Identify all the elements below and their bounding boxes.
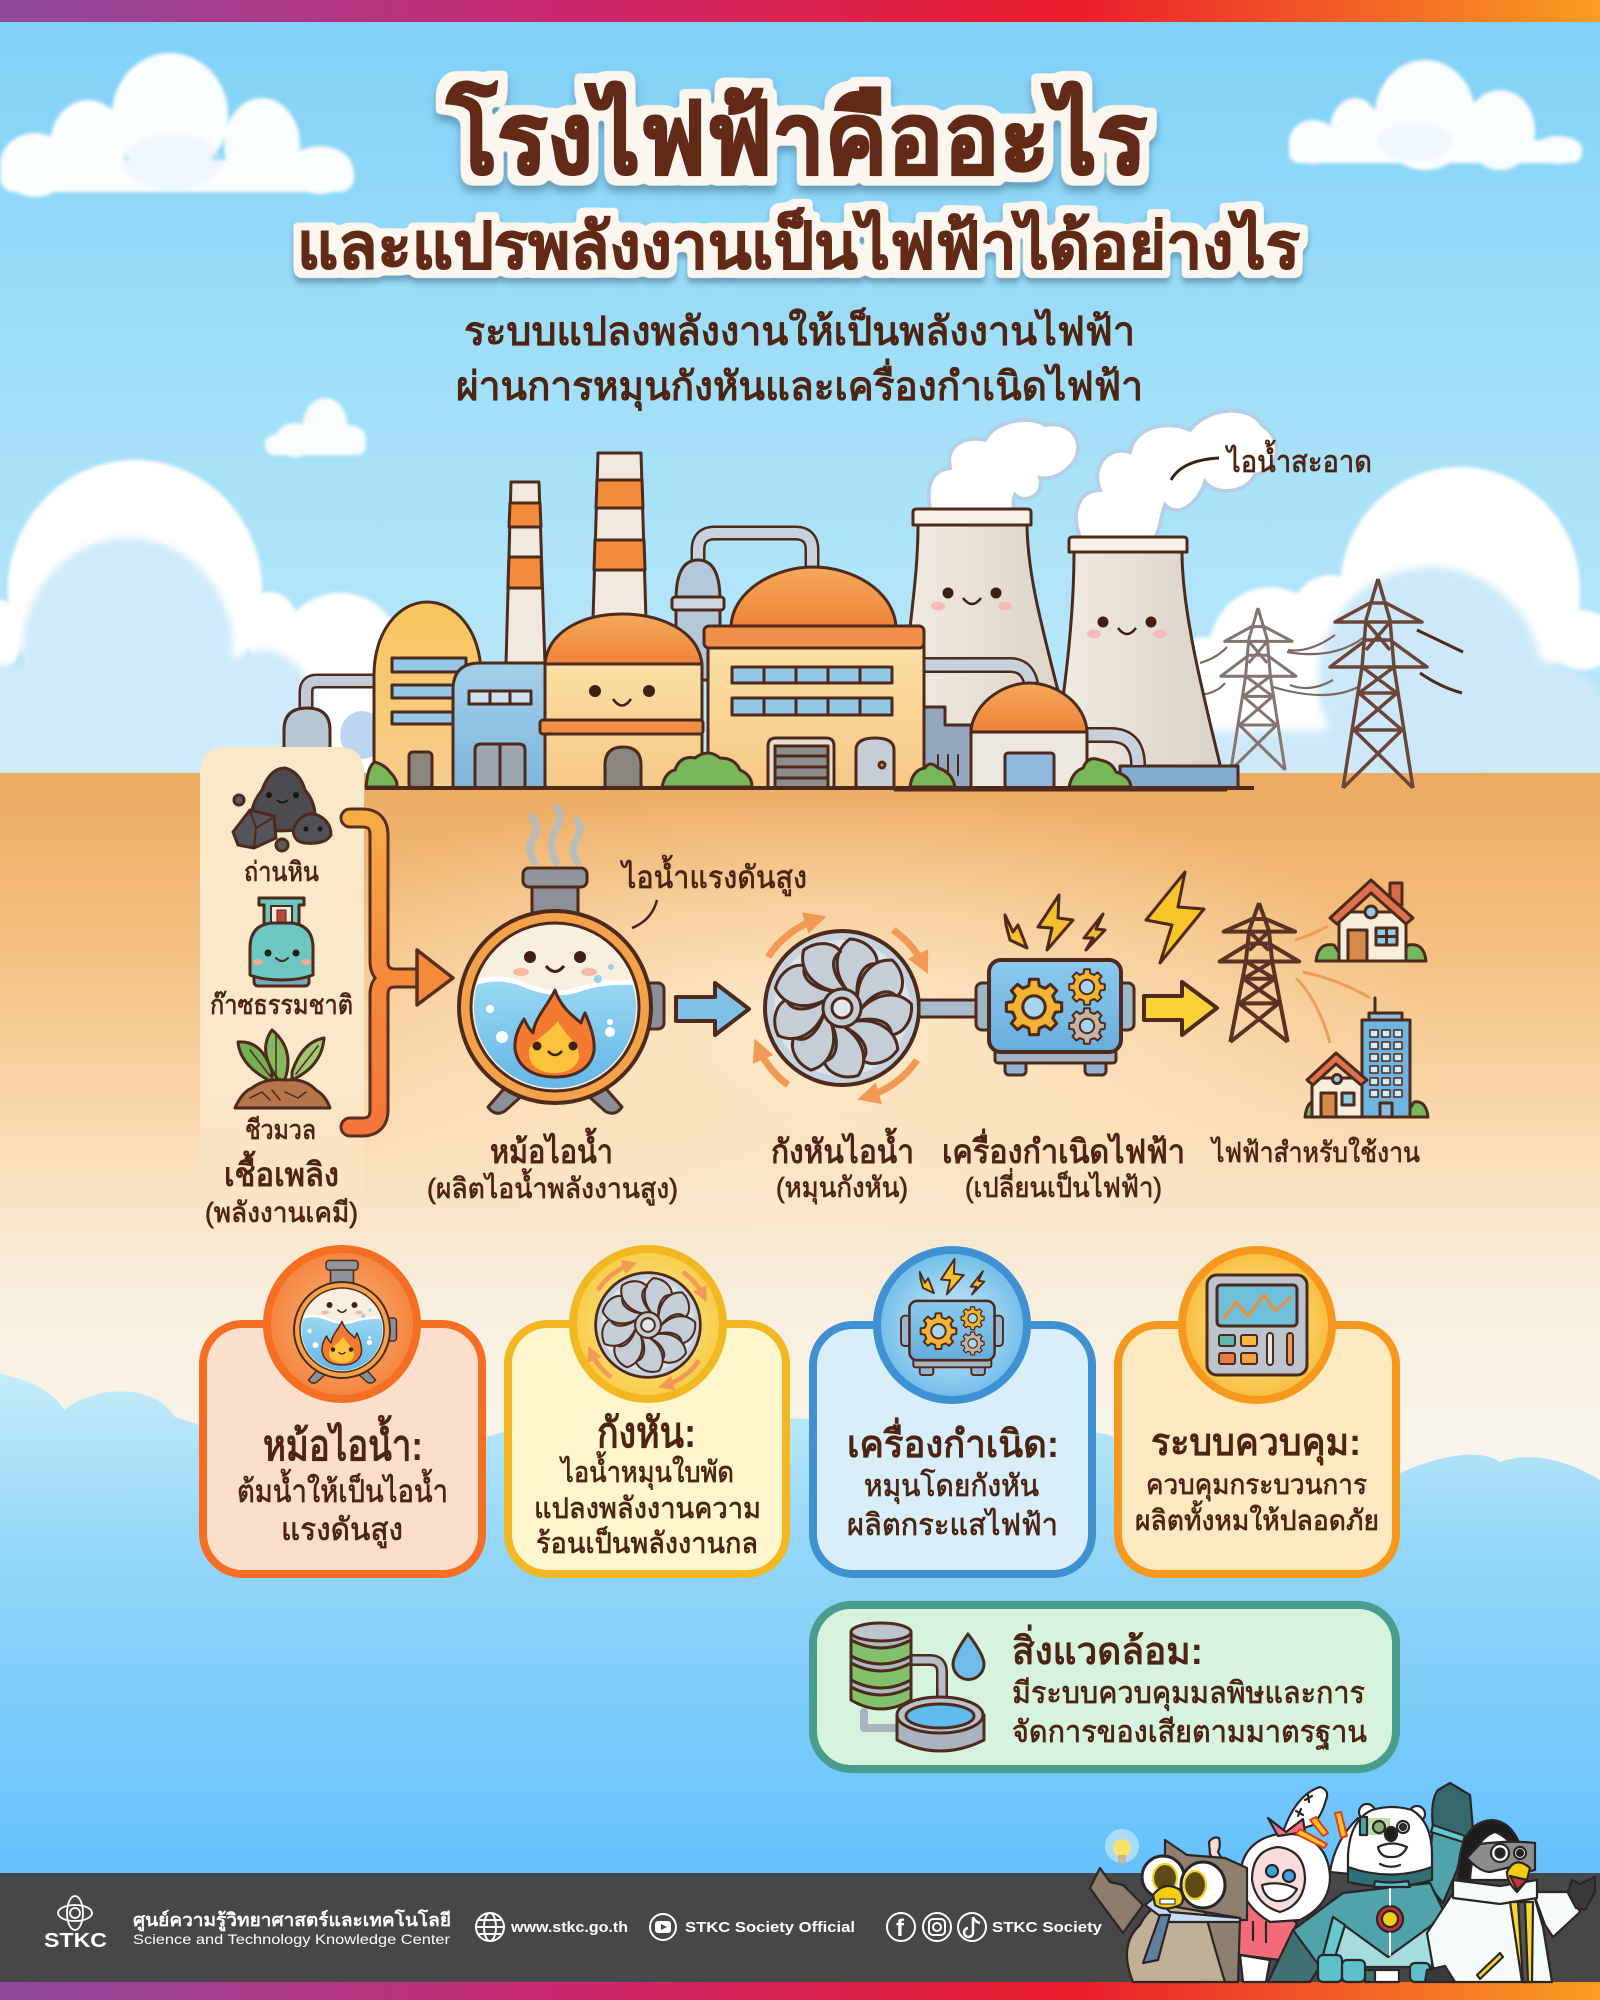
yellow silo: [374, 602, 481, 788]
background sky: [0, 0, 1600, 776]
footer logo: [44, 1896, 107, 1952]
cloud: large left: [0, 460, 398, 790]
bushes: [366, 753, 1131, 787]
icon: turbine: [758, 919, 924, 1097]
text: natural gas: ก๊าซธรรมชาติ: [210, 990, 353, 1020]
subtitle: ระบบแปลงพลังงานให้เป็นพลังงานไฟฟ้า: [464, 306, 1135, 354]
chimney thin: [506, 482, 545, 664]
card text: [237, 1414, 448, 1548]
card text: ระบบควบคุม:: [1151, 1422, 1361, 1466]
cooling tower rear: [895, 509, 1080, 790]
label: steam turbine: กังหันไอน้ำ: [771, 1127, 914, 1170]
youtube link: STKC Society Official: [685, 1919, 855, 1936]
coal face: [266, 792, 322, 832]
label: steam turbine: [771, 1127, 914, 1205]
ground and lower background: [0, 773, 1600, 1493]
icon: rising steam: [530, 807, 580, 862]
footer organisation name: [133, 1909, 451, 1947]
arrow: boiler to turbine: [676, 983, 749, 1035]
light bulb: [1105, 1829, 1139, 1863]
icon: grid pylon: [1220, 903, 1299, 1042]
subtitle: ผ่านการหมุนกังหันและเครื่องกำเนิดไฟฟ้า: [456, 358, 1143, 412]
icon: generator: [976, 895, 1134, 1075]
text: coal: ถ่านหิน: [244, 857, 319, 887]
blue tank: [672, 560, 724, 680]
label: high pressure steam: [619, 855, 807, 928]
face on rear tower: [931, 588, 1012, 610]
icon: house and tower block: [1305, 998, 1428, 1117]
website link: [476, 1913, 628, 1941]
text: biomass: ชีวมวล: [245, 1115, 316, 1145]
steam plumes: [929, 411, 1277, 538]
icon: biomass: [235, 1030, 330, 1108]
left tank and pipe: [284, 681, 380, 760]
card text: ผลิตกระแสไฟฟ้า: [847, 1507, 1058, 1542]
large pylon: [1330, 579, 1427, 788]
card text: ร้อนเป็นพลังงานกล: [536, 1525, 758, 1560]
icon: boiler: [459, 868, 664, 1113]
card text: ควบคุมกระบวนการ: [1146, 1469, 1367, 1502]
ground glow: [200, 790, 1440, 1250]
card text: ต้มน้ำให้เป็นไอน้ำ: [237, 1469, 448, 1509]
connecting pipes: [924, 665, 1138, 765]
icon: large lightning bolt: [1146, 872, 1204, 963]
panel: boiler card: [203, 1249, 482, 1574]
owl: [1090, 1840, 1247, 1982]
gray annex: [924, 707, 971, 788]
card text: หม้อไอน้ำ:: [263, 1414, 423, 1469]
card text: แรงดันสูง: [281, 1512, 403, 1548]
icon: generator small: [901, 1259, 1003, 1375]
youtube link: [650, 1914, 855, 1940]
card text: [534, 1409, 761, 1560]
cloud: top right: [1289, 60, 1582, 170]
card text: ไอน้ำหมุนใบพัด: [559, 1451, 734, 1490]
arrow: generator to grid: [1144, 982, 1217, 1035]
footer band: [0, 1873, 1600, 1982]
icon: coal: [233, 768, 331, 851]
icon: house: [1316, 880, 1426, 961]
face on front tower: [1087, 616, 1167, 638]
cloud: large right: [1175, 467, 1600, 793]
icon: gas cylinder: [250, 898, 313, 986]
footer organisation name: Science and Technology Knowledge Center: [133, 1931, 450, 1947]
card text: จัดการของเสียตามมาตรฐาน: [1012, 1716, 1367, 1750]
social icons: f: [896, 1915, 905, 1942]
lower sky wave: [0, 1374, 1600, 1880]
label: boiler: (ผลิตไอน้ำพลังงานสูง): [427, 1168, 678, 1206]
footer logo: STKC: [44, 1930, 107, 1952]
label: clean steam: [1171, 440, 1372, 480]
card text: [1012, 1624, 1367, 1750]
label: generator: [942, 1128, 1185, 1203]
panel: environment card: [813, 1605, 1396, 1769]
panel: fuels: [200, 747, 364, 1240]
card text: [1135, 1422, 1379, 1536]
orange domed building: [540, 614, 703, 788]
subtitle: [456, 306, 1143, 412]
card text: แปลงพลังงานความ: [534, 1493, 761, 1525]
icon: control panel: [1207, 1275, 1307, 1375]
shaft: [919, 1000, 981, 1017]
title: [297, 80, 1300, 282]
icon: boiler small: [294, 1260, 396, 1383]
face on domed building: [589, 685, 655, 706]
label: boiler: หม้อไอน้ำ: [490, 1127, 613, 1170]
card text: มีระบบควบคุมมลพิษและการ: [1012, 1677, 1365, 1712]
power plant illustration: [284, 411, 1463, 790]
text: chemical energy: (พลังงานเคมี): [205, 1197, 358, 1228]
panel: control card: [1118, 1250, 1396, 1574]
bear: [1268, 1783, 1473, 1982]
social icons: [887, 1913, 1103, 1942]
footer organisation name: ศูนย์ความรู้วิทยาศาสตร์และเทคโนโลยี: [133, 1909, 451, 1932]
card text: สิ่งแวดล้อม:: [1012, 1624, 1203, 1673]
icon: turbine small: [591, 1264, 704, 1386]
blue building: [453, 663, 548, 788]
icon: filter stack and basin: [851, 1623, 984, 1751]
card text: ผลิตทั้งหมให้ปลอดภัย: [1135, 1500, 1379, 1536]
label: steam turbine: (หมุนกังหัน): [776, 1172, 908, 1205]
large pylon trailing wires: [1417, 630, 1463, 693]
footer gradient bar: [0, 1982, 1600, 2000]
card text: หมุนโดยกังหัน: [864, 1468, 1039, 1505]
main building: [704, 567, 924, 788]
heading: fuel: เชื้อเพลิง: [224, 1150, 339, 1193]
bunny: [1209, 1787, 1368, 1982]
website link: www.stkc.go.th: [510, 1919, 628, 1936]
arrow: fuel bracket to boiler: [350, 818, 453, 1127]
small background pylon: [1221, 608, 1296, 770]
chimney tall: [593, 453, 646, 620]
label: generator: (เปลี่ยนเป็นไฟฟ้า): [965, 1168, 1162, 1203]
blue base block: [1120, 766, 1238, 788]
top gradient bar: [0, 0, 1600, 22]
card text: กังหัน:: [597, 1409, 696, 1456]
plant ground line: [365, 786, 1254, 790]
label: generator: เครื่องกำเนิดไฟฟ้า: [942, 1128, 1185, 1170]
label: boiler: [427, 1127, 678, 1206]
small dome building: [971, 683, 1087, 788]
penguin: [1425, 1820, 1595, 1982]
mascots: [1090, 1783, 1595, 1982]
cloud: small middle: [265, 398, 366, 457]
title: และแปรพลังงานเป็นไฟฟ้าได้อย่างไร: [297, 208, 1300, 282]
label: high pressure steam: ไอน้ำแรงดันสูง: [619, 855, 807, 896]
social icons: STKC Society: [992, 1919, 1103, 1936]
cooling tower front: [1050, 537, 1226, 790]
card text: [847, 1417, 1059, 1542]
sparks: [1296, 1812, 1347, 1848]
card text: เครื่องกำเนิด:: [847, 1417, 1059, 1466]
label: clean steam: ไอน้ำสะอาด: [1225, 440, 1372, 479]
cloud: top left: [0, 53, 354, 197]
label: electricity for use: ไฟฟ้าสำหรับใช้งาน: [1210, 1136, 1420, 1168]
power wires to buildings: [1295, 926, 1370, 1043]
arched pipe: [698, 533, 812, 575]
power lines: [1200, 635, 1363, 695]
panel: turbine card: [508, 1249, 786, 1574]
panel: generator card: [813, 1250, 1092, 1574]
title: โรงไฟฟ้าคืออะไร: [446, 80, 1147, 195]
